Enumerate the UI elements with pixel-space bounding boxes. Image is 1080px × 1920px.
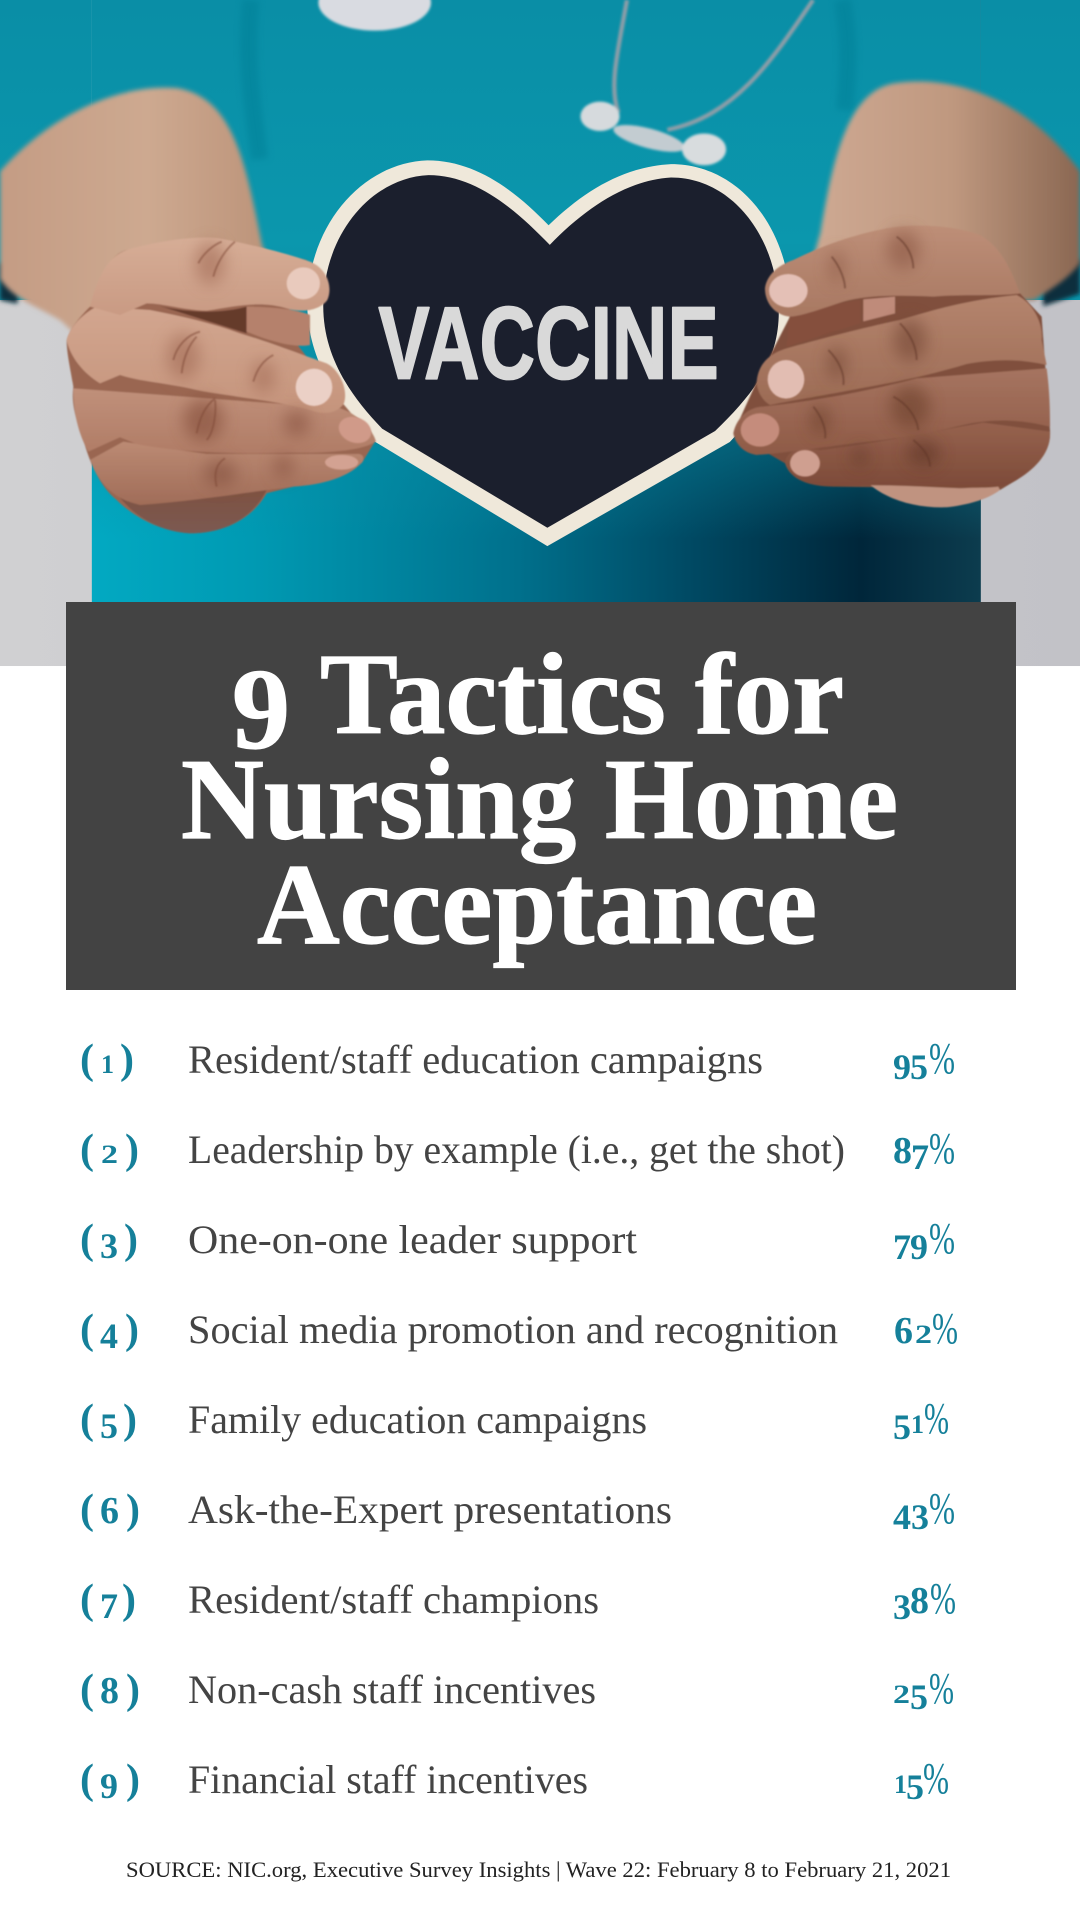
percent 15	[894, 1754, 949, 1807]
label 1: Resident/staff education campaigns	[188, 1037, 763, 1082]
label 7: Resident/staff champions	[188, 1577, 599, 1622]
left hand	[67, 237, 376, 533]
rank 3	[80, 1217, 138, 1266]
title line 2: Nursing Home	[181, 736, 898, 864]
percent 51: %	[924, 1394, 949, 1443]
photo: nurse holding vaccine heart	[0, 0, 1080, 666]
percent 38: 3	[893, 1587, 911, 1627]
label 5: Family education campaigns	[188, 1397, 647, 1442]
rank 5: (	[80, 1397, 94, 1443]
rank 4: )	[125, 1307, 139, 1353]
percent 79: 9	[910, 1227, 928, 1267]
percent 87: 8	[893, 1130, 912, 1172]
left knuckle shading	[167, 242, 310, 487]
rank 6: (	[80, 1487, 94, 1533]
rank 2	[80, 1127, 139, 1173]
label 4: Social media promotion and recognition	[188, 1307, 838, 1352]
percent 51: 5	[893, 1407, 911, 1447]
percent 95: 9	[893, 1047, 911, 1087]
source note: SOURCE: NIC.org, Executive Survey Insights | Wave 22: February 8 to February 21, 2021	[126, 1857, 951, 1882]
rank 5	[80, 1397, 137, 1446]
percent 51: 1	[911, 1410, 924, 1439]
percent 62	[894, 1304, 958, 1353]
rank 3: (	[80, 1217, 94, 1263]
scrubs	[0, 0, 1080, 602]
photo background	[0, 300, 1080, 666]
percent 87	[893, 1124, 955, 1177]
percent 95: %	[929, 1034, 955, 1083]
rank 8	[80, 1667, 140, 1713]
percent 62: 2	[915, 1320, 932, 1349]
rank 8: )	[126, 1667, 140, 1713]
rank 6: )	[126, 1487, 140, 1533]
rank 1: (	[80, 1037, 94, 1083]
percent 79	[893, 1214, 955, 1267]
row 1	[80, 1034, 955, 1087]
row 2	[80, 1124, 955, 1177]
percent 15: 5	[906, 1767, 924, 1807]
title line 3: Acceptance	[257, 841, 817, 969]
heart blackboard	[323, 175, 779, 528]
percent 25: 5	[910, 1677, 928, 1717]
row 3	[80, 1214, 955, 1267]
percent 62: 6	[894, 1310, 913, 1352]
percent 62: %	[932, 1304, 958, 1353]
rank 3: )	[124, 1217, 138, 1263]
title line 1: Tactics for	[320, 631, 844, 759]
row 8	[80, 1664, 954, 1717]
rank 9: )	[126, 1757, 140, 1803]
rank 7	[80, 1577, 136, 1626]
percent 25: 2	[893, 1680, 910, 1709]
percent 15: %	[923, 1754, 949, 1803]
row 6	[80, 1484, 955, 1537]
percent 43	[893, 1484, 955, 1537]
rank 7: (	[80, 1577, 94, 1623]
label 9: Financial staff incentives	[188, 1757, 588, 1802]
rank 1: )	[120, 1037, 134, 1083]
label 6: Ask-the-Expert presentations	[188, 1487, 672, 1532]
percent 87: %	[929, 1124, 955, 1173]
rank 4	[80, 1307, 139, 1356]
rank 9: 9	[100, 1766, 118, 1806]
rank 6: 6	[100, 1490, 119, 1532]
rank 2: (	[80, 1127, 94, 1173]
row 5	[80, 1394, 949, 1447]
row 9	[80, 1754, 949, 1807]
percent 95	[893, 1034, 955, 1087]
row 7	[80, 1574, 956, 1627]
rank 7: 7	[100, 1586, 118, 1626]
percent 38	[893, 1574, 956, 1627]
percent 25	[893, 1664, 954, 1717]
left creases	[173, 242, 273, 487]
percent 43: 3	[911, 1497, 929, 1537]
rank 4: (	[80, 1307, 94, 1353]
percent 25: %	[929, 1664, 954, 1713]
stethoscope	[318, 0, 813, 165]
heart sign	[307, 160, 791, 546]
rank 7: )	[122, 1577, 136, 1623]
percent 87: 7	[911, 1137, 929, 1177]
title panel	[66, 602, 1016, 990]
label 3: One-on-one leader support	[188, 1217, 637, 1262]
rank 8: (	[80, 1667, 94, 1713]
label 2: Leadership by example (i.e., get the shot)	[188, 1127, 845, 1172]
tactics list	[80, 1034, 958, 1807]
row 4	[80, 1304, 958, 1356]
percent 38: 8	[910, 1580, 929, 1622]
rank 4: 4	[100, 1316, 118, 1356]
percent 79: %	[929, 1214, 955, 1263]
rank 5: )	[123, 1397, 137, 1443]
rank 2: 2	[101, 1140, 118, 1169]
percent 43: %	[929, 1484, 955, 1533]
rank 8: 8	[100, 1670, 119, 1712]
right creases	[813, 237, 930, 467]
rank 2: )	[125, 1127, 139, 1173]
percent 38: %	[930, 1574, 956, 1623]
title line 1: 9	[232, 646, 290, 774]
right knuckle shading	[811, 230, 940, 467]
label 8: Non-cash staff incentives	[188, 1667, 596, 1712]
percent 15: 1	[894, 1770, 907, 1799]
rank 9	[80, 1757, 140, 1806]
rank 1: 1	[101, 1050, 114, 1079]
rank 5: 5	[100, 1406, 118, 1446]
rank 1	[80, 1037, 134, 1083]
word: VACCINE: VACCINE	[378, 285, 719, 400]
heart outer frame	[307, 160, 791, 546]
right hand	[733, 226, 1050, 507]
percent 51	[893, 1394, 949, 1447]
percent 79: 7	[893, 1227, 911, 1267]
left arm	[0, 84, 292, 332]
rank 3: 3	[100, 1226, 118, 1266]
percent 43: 4	[893, 1497, 911, 1537]
right arm	[796, 81, 1080, 318]
rank 6	[80, 1487, 140, 1533]
rank 9: (	[80, 1757, 94, 1803]
percent 95: 5	[910, 1047, 928, 1087]
